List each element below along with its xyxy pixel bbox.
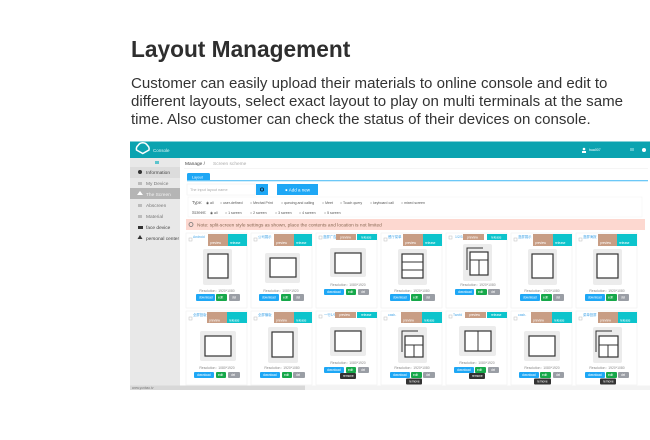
layout card 3: preview [340,236,352,240]
layout card 6: edit [543,296,548,300]
layout card 1: del [232,296,237,300]
layout card 3: Resolution : 1080*1920 [330,283,366,287]
layout card 7: 竖屏海报 [583,234,597,239]
layout card 7: download [588,296,602,300]
layout card 14 [576,311,637,385]
layout card 13: preview [533,318,545,322]
layout card 13: del [556,373,561,377]
layout card 5: download [458,290,472,294]
layout card 2 [251,233,312,308]
layout card 14: 菜单竖屏 [583,312,597,317]
filter rows: ○ user-defined [220,201,243,205]
search box: The input layout name [190,188,228,192]
layout card 3: release [361,236,372,240]
layout card 11: edit [413,373,418,377]
layout card 10: Resolution : 1080*1920 [330,361,366,365]
layout card 3: del [361,290,366,294]
note banner: Note: split-screen style settings as shown, place the contents and location is not limited [197,222,382,228]
description text: time. Also customer can check the status of their devices on console. [131,111,591,128]
sidebar: Abscreen [146,203,167,209]
layout card 1: edit [218,296,223,300]
breadcrumb: Manage / [185,161,206,167]
console header bar: Console [153,148,170,153]
filter rows: ○ keyboard call [370,201,394,205]
layout card 11: preview [403,318,415,322]
sidebar: My Device [146,181,169,187]
layout card 8: edit [218,373,223,377]
layout card 5: Resolution : 1920*1080 [460,283,496,287]
layout card 14: del [621,373,626,377]
layout card 10: release [361,313,372,317]
layout tab [187,173,648,181]
layout card 9: download [263,373,277,377]
layout card 1: Resolution : 1920*1080 [199,289,235,293]
filter rows: Type: [192,200,202,205]
sidebar: personal center [146,236,179,242]
layout card 12 [446,311,507,385]
layout card 7: edit [608,296,613,300]
layout card 5 [446,233,507,308]
layout card 8: 全屏竖版 [193,312,207,317]
layout card 10: preview [339,313,351,317]
layout card 3: 竖屏广告 [323,234,337,239]
layout card 14: Resolution : 1920*1080 [589,366,625,370]
filter rows: ○ 4 screen [299,211,316,215]
layout card 3: download [327,290,341,294]
filter rows: Screen: [192,210,206,215]
layout card 4: del [426,296,431,300]
layout card 13: cash- [518,313,526,317]
layout card 8: release [229,318,240,322]
layout card 9: preview [276,318,288,322]
layout card 13: download [522,373,536,377]
title: Layout Management [131,36,350,62]
layout card 12: del [491,368,496,372]
layout card 3 [316,233,377,308]
filter rows: ○ Touch query [340,201,362,205]
bottom scrollbar [130,386,650,390]
layout card 5: 1/2/3 [455,235,463,239]
layout card 14: download [588,373,602,377]
layout card 2: edit [283,296,288,300]
layout card 11: remove [409,380,420,384]
layout card 2: Resolution : 1080*1920 [263,289,299,293]
layout card 5: preview [467,236,479,240]
layout card 8 [186,311,247,385]
layout card 9: 全屏横版 [258,312,272,317]
layout card 14: preview [600,318,612,322]
layout card 10: download [327,368,341,372]
layout card 10 [316,311,377,385]
description text [131,75,623,128]
layout card 6: del [556,296,561,300]
filter rows: ○ 3 screen [275,211,292,215]
layout card 11 [381,311,442,385]
layout card 13: Resolution : 1080*1920 [524,366,560,370]
layout card 4: 餐厅菜单 [388,234,402,239]
layout card 1: download [199,296,213,300]
layout card 6: release [555,241,566,245]
layout card 11: cash- [388,313,396,317]
layout card 9: del [296,373,301,377]
layout card 12: Resolution : 1080*1920 [459,361,495,365]
description text: different layouts, select exact layout to play on multi terminals at the same [131,93,623,110]
layout card 10: remove [343,374,354,378]
add new button [277,184,318,195]
layout card 5: release [491,236,502,240]
layout card 13: edit [542,373,547,377]
layout card 4: preview [405,241,417,245]
layout card 8: del [231,373,236,377]
layout card 1: Android [193,235,205,239]
layout card 7: Resolution : 1920*1080 [589,289,625,293]
filter rows: ○ mixed screen [401,201,425,205]
layout card 8: download [197,373,211,377]
search box [187,184,268,195]
filter rows: ○ 5 screen [324,211,341,215]
layout card 7 [576,233,637,308]
layout card 11: release [424,318,435,322]
breadcrumb [184,161,648,169]
layout card 14: release [620,318,631,322]
layout card 9: Resolution : 1920*1080 [264,366,300,370]
layout card 12: Twofd [453,313,462,317]
layout card 6: preview [535,241,547,245]
layout card 14: edit [608,373,613,377]
bottom scrollbar: www.yunbao.tv [132,386,154,390]
console header bar: hua007 [589,148,601,152]
layout card 9: release [296,318,307,322]
layout card 7: preview [600,241,612,245]
console header bar [130,142,650,158]
filter rows: ○ 2 screen [250,211,267,215]
layout card 11: Resolution : 1920*1080 [394,366,430,370]
layout card 2: del [296,296,301,300]
layout card 2: release [296,241,307,245]
layout card 2: preview [276,241,288,245]
layout card 10: 一行1/9 [324,312,336,317]
layout card 4 [381,233,442,308]
layout card 13: remove [537,380,548,384]
layout card 8: preview [209,318,221,322]
description text: Customer can easily upload their materials to online console and edit to [131,75,607,92]
filter rows: ○ queuing and calling [281,201,314,205]
layout card 13: release [554,318,565,322]
note banner [186,219,645,230]
filter rows: ◉ all [206,201,214,205]
filter rows: ◉ all [210,211,218,215]
layout card 13 [511,311,572,385]
filter rows: ○ Mechat Print [250,201,273,205]
layout tab: Layout [192,176,203,180]
layout card 5: edit [478,290,483,294]
layout card 12: release [491,313,502,317]
layout card 5: del [491,290,496,294]
layout card 7: release [619,241,630,245]
filter rows: ○ Meet [322,201,333,205]
layout card 2: download [262,296,276,300]
layout card 1 [186,233,247,308]
layout card 4: edit [413,296,418,300]
filter rows [188,197,642,217]
sidebar: Information [146,170,170,176]
layout card 10: del [361,368,366,372]
layout card 6: download [523,296,537,300]
layout card 12: preview [469,313,481,317]
layout card 9: edit [284,373,289,377]
layout card 6 [511,233,572,308]
layout card 11: del [426,373,431,377]
layout card 4: release [425,241,436,245]
layout card 10: edit [348,368,353,372]
layout card 2: 公司展示 [258,234,272,239]
layout card 12: edit [477,368,482,372]
layout card 11: download [393,373,407,377]
layout card 7: del [621,296,626,300]
layout card 12: remove [472,374,483,378]
sidebar: The Screen [146,192,171,198]
layout card 8: Resolution : 1080*1920 [199,366,235,370]
sidebar [130,158,180,386]
sidebar: face device [146,225,171,231]
layout card 9 [251,311,312,385]
layout card 1: preview [210,241,222,245]
layout card 4: Resolution : 1920*1080 [394,289,430,293]
filter rows: ○ 1 screen [225,211,242,215]
add new button: ● Add a new [285,188,311,192]
layout card 3: edit [348,290,353,294]
layout card 6: 竖屏展示 [518,234,532,239]
layout card 6: Resolution : 1920*1080 [524,289,560,293]
layout card 14: remove [603,380,614,384]
layout card 4: download [393,296,407,300]
layout card 1: release [230,241,241,245]
layout card 12: download [457,368,471,372]
sidebar: Material [146,214,163,220]
breadcrumb: Screen scheme [213,161,247,167]
